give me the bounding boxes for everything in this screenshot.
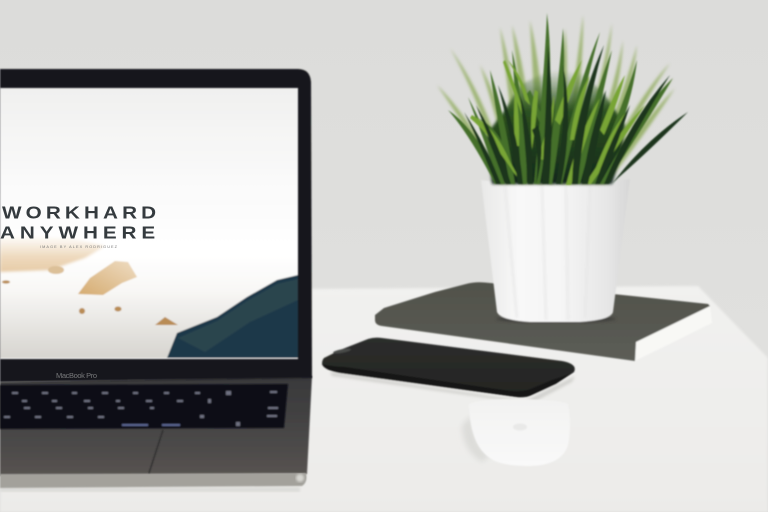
- screen title: [0, 203, 156, 249]
- cliff ridge tint: [178, 279, 298, 352]
- pot shadow on notebook: [496, 315, 616, 323]
- soft back blades: [437, 15, 675, 184]
- small rocks: [2, 266, 178, 325]
- key legends: [4, 391, 278, 426]
- phone body: [322, 338, 575, 397]
- notebook cover: [375, 282, 710, 361]
- screen title: IMAGE BY ALEX RODRIGUEZ: [40, 245, 118, 249]
- laptop desk shadow: [0, 487, 300, 492]
- MacBook Pro label: MacBook Pro: [56, 371, 97, 380]
- laptop front lip: [0, 473, 306, 488]
- trackpad divider: [149, 430, 163, 473]
- mid blades: [448, 13, 673, 184]
- lip highlight: [296, 474, 304, 482]
- mouse logo: [513, 424, 527, 430]
- notebook: [375, 282, 712, 361]
- dark coastal cliff: [167, 275, 298, 358]
- far headland: [0, 235, 105, 272]
- pot ribs: [505, 186, 590, 320]
- mouse body: [469, 399, 570, 466]
- screen title: WORKHARD: [2, 203, 156, 223]
- central rock: [78, 261, 137, 295]
- phone shadow: [330, 372, 575, 404]
- dark core: [486, 70, 625, 184]
- phone camera: [333, 348, 351, 354]
- pot body: [481, 179, 630, 322]
- keyboard: [0, 384, 288, 429]
- wall: [0, 0, 768, 360]
- mouse shadow: [462, 415, 490, 462]
- dark foreground blades: [464, 45, 688, 184]
- desk surface: [0, 286, 768, 512]
- key deck: [0, 384, 288, 429]
- phone side edge: [322, 364, 574, 397]
- bright highlight blades: [470, 60, 645, 185]
- screen title: ANYWHERE: [0, 223, 155, 243]
- laptop: [0, 69, 312, 492]
- plant leaves: [437, 13, 688, 185]
- mouse: [462, 399, 570, 466]
- laptop base: [0, 376, 312, 476]
- screen sea: [0, 255, 298, 358]
- notebook pages: [635, 305, 712, 361]
- screen sky: [0, 88, 298, 359]
- laptop lid: [0, 69, 312, 382]
- screen photo: [0, 88, 298, 359]
- smartphone: [322, 338, 575, 404]
- plant pot: [481, 179, 630, 323]
